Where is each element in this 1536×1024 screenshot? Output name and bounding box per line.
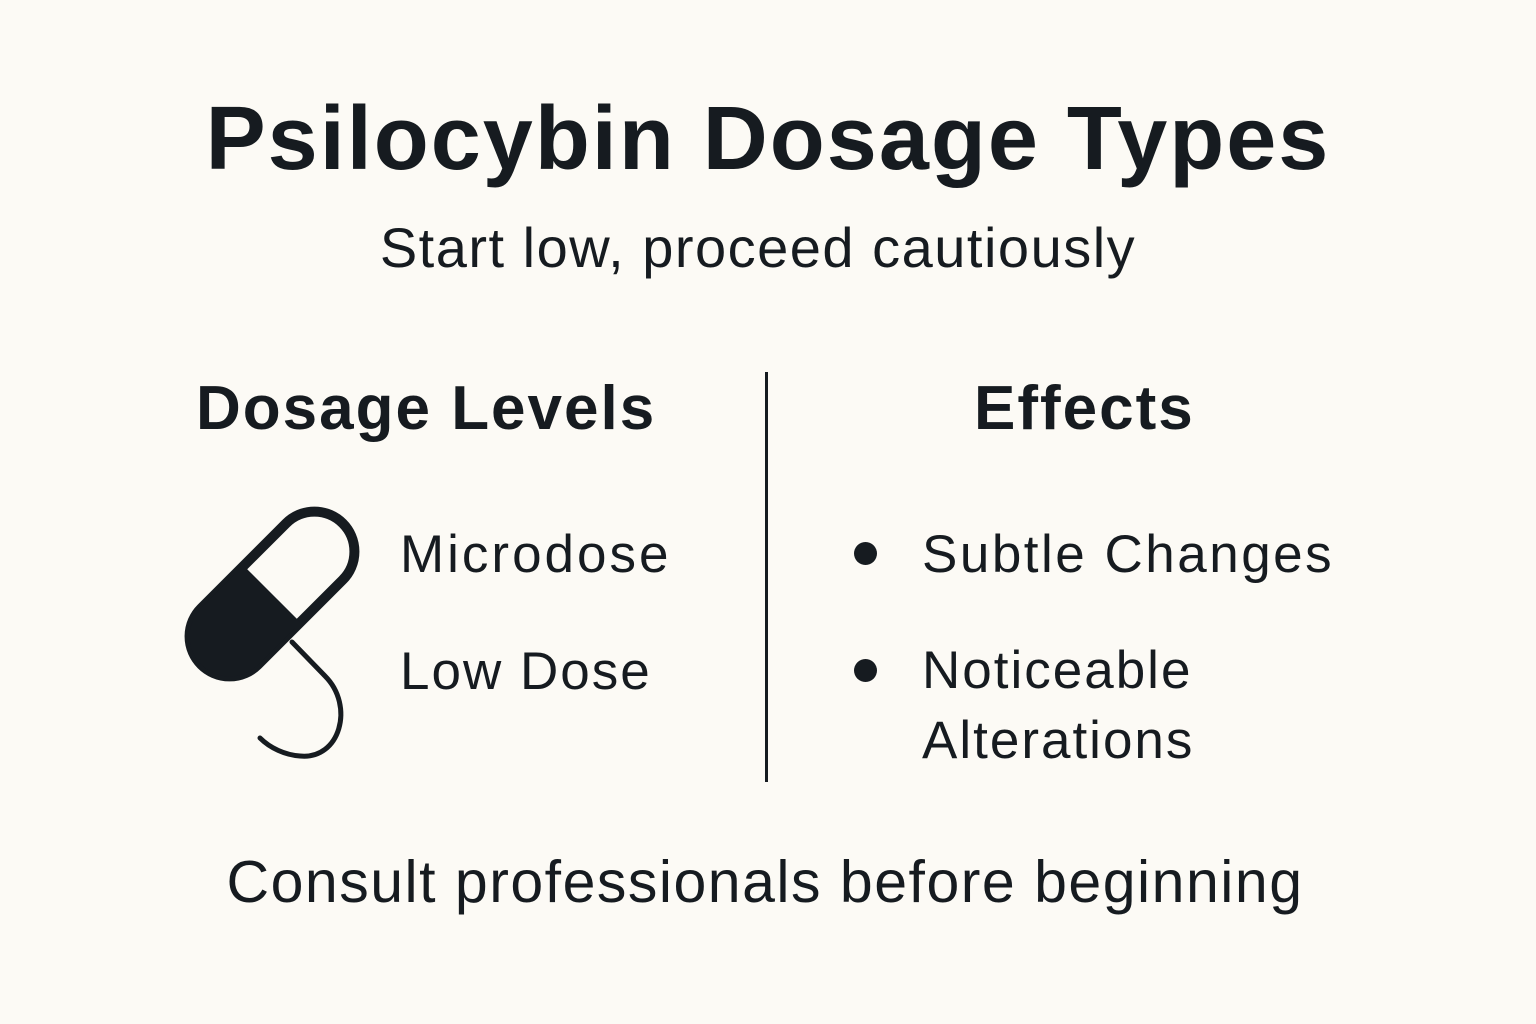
text: subtle changes: Subtle Changes: [922, 525, 1334, 584]
heading: dosage levels: Dosage Levels: [196, 374, 656, 443]
text: microdose: Microdose: [400, 525, 671, 584]
divider: [765, 372, 768, 782]
text: noticeable alterations: Alterations: [922, 711, 1194, 770]
text: noticeable alterations: Noticeable: [922, 641, 1192, 700]
subtitle: Start low, proceed cautiously: [380, 216, 1136, 279]
text: low dose: Low Dose: [400, 642, 652, 701]
footer: Consult professionals before beginning: [226, 849, 1304, 915]
text: noticeable alterations: [922, 641, 1194, 770]
heading: effects: Effects: [974, 374, 1195, 443]
bullet 1: [854, 542, 877, 565]
bullet 2: [854, 659, 877, 682]
title: Psilocybin Dosage Types: [206, 89, 1330, 189]
icon: capsule pill: [184, 506, 360, 759]
